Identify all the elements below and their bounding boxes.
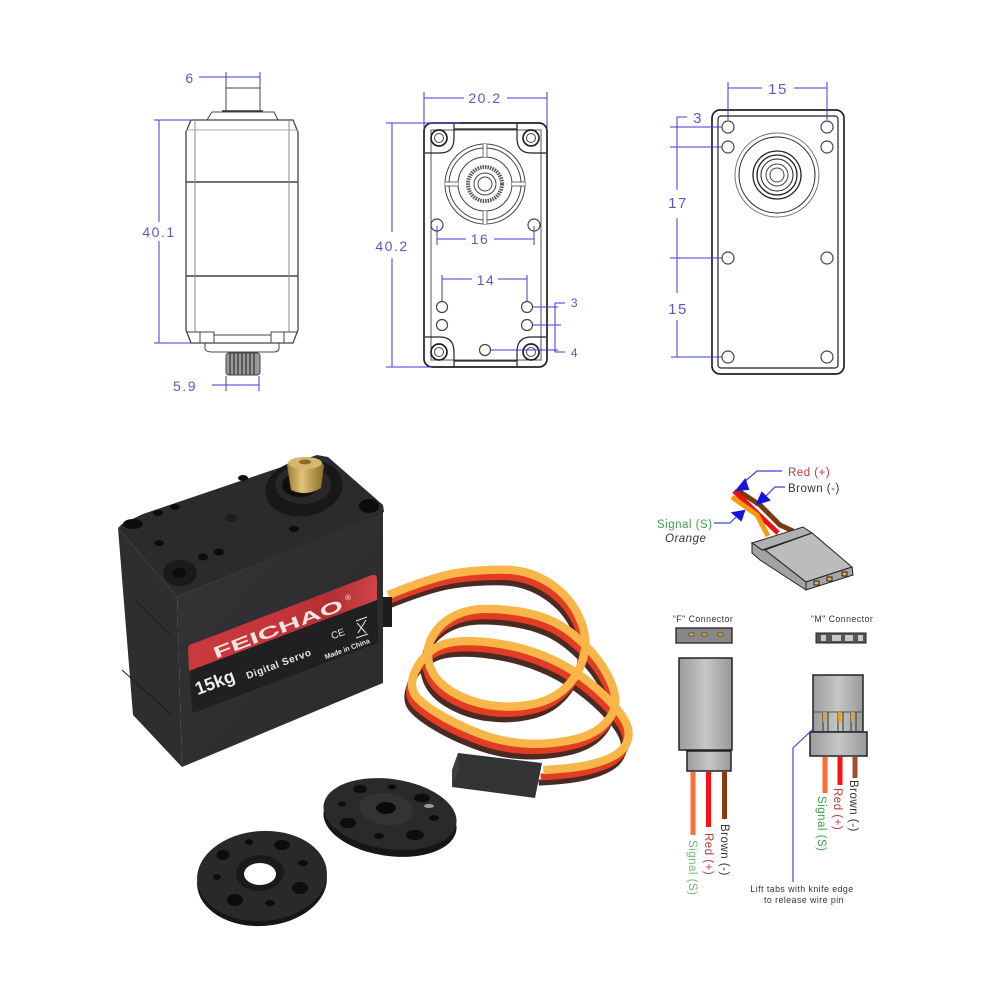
panel: side view drawing [142,70,298,394]
dimension: 16 [437,226,534,247]
M heading: "M" Connector [811,614,873,624]
wire loop [384,570,629,783]
F wire labels: Brown (-) [718,824,730,876]
note: release pin: to release wire pin [764,895,844,905]
connector 3D [752,527,853,590]
dimension: 6 [185,70,260,88]
servo horn disc, lower [194,827,330,930]
F wires [690,772,727,835]
F wire labels: Red (+) [702,833,714,875]
wire connector [452,753,542,798]
label origin: Made in China [324,638,371,661]
servo rear outline [712,110,844,374]
dimension: 15 left: 15 [668,301,688,318]
arrow: red wire [737,471,782,490]
brand name: FEICHAO [211,597,346,662]
CE mark: CE [330,627,347,642]
product label [188,575,378,713]
label: orange: Orange [665,533,706,545]
dimension: 14 [442,272,527,301]
F wire labels: Signal (S) [686,840,698,896]
screw holes on top face [123,475,379,586]
dimension: 40.1 [142,120,192,343]
label: red: Red (+) [788,467,830,479]
dimension: 3 and 4: 4 [571,346,579,360]
M wire labels [815,780,859,852]
panel: wiring diagram [657,467,873,905]
recycle bin mark [356,617,368,638]
M connector [810,614,873,852]
dimension: 5.9: 5.9 [173,378,197,394]
dimension: 14: 14 [477,272,495,288]
three-wire ribbon [732,490,793,536]
dimension: 17 [668,147,722,258]
F wire labels [686,824,730,896]
dimension: 15 top [728,81,827,120]
registered mark: ® [344,592,353,603]
dimension: 3 and 4 [491,296,579,360]
servo side outline [186,88,298,375]
M end view [816,633,866,643]
F connector [673,614,733,896]
dimension: 40.2 [375,123,460,367]
label model: Digital Servo [245,647,313,682]
wire colours callout [657,467,853,590]
brass output gear [287,457,324,493]
M wire labels: Red (+) [831,788,843,830]
dimension: 3: 3 [693,110,703,127]
M wires [822,757,858,793]
servo front outline [424,123,547,367]
dimension: 40.2: 40.2 [375,238,409,254]
dimension: 15 top: 15 [768,81,788,98]
M wire labels: Brown (-) [847,780,859,832]
dimension: 40.1: 40.1 [142,224,176,240]
dimension: 17: 17 [668,195,688,212]
dimension: 16: 16 [471,231,489,247]
F end view [676,628,732,643]
arrow: signal wire [714,511,744,523]
label: brown: Brown (-) [788,483,840,495]
dimension: 15 left [668,258,722,357]
F body [679,658,732,771]
note: lift tabs: Lift tabs with knife edge [750,884,854,894]
panel: rear view drawing [668,81,844,374]
output collar [261,454,347,522]
dimension: 20.2: 20.2 [468,90,502,106]
arrow: brown wire [757,487,785,504]
servo body [118,454,392,767]
dimension: 5.9 [173,376,259,394]
dimension: 6: 6 [185,70,195,86]
M body [810,675,867,756]
dimension: 20.2 [424,90,547,130]
servo horn disc, upper [319,770,461,865]
panel: servo photo [118,454,629,930]
M wire labels: Signal (S) [815,796,827,852]
pointer line to tab [793,730,812,882]
label: signal: Signal (S) [657,519,712,531]
dimension: 3 [670,110,722,147]
F heading: "F" Connector [673,614,733,624]
torque rating: 15kg [192,666,238,699]
panel: front view drawing [375,90,579,367]
dimension: 3 and 4: 3 [571,296,579,310]
